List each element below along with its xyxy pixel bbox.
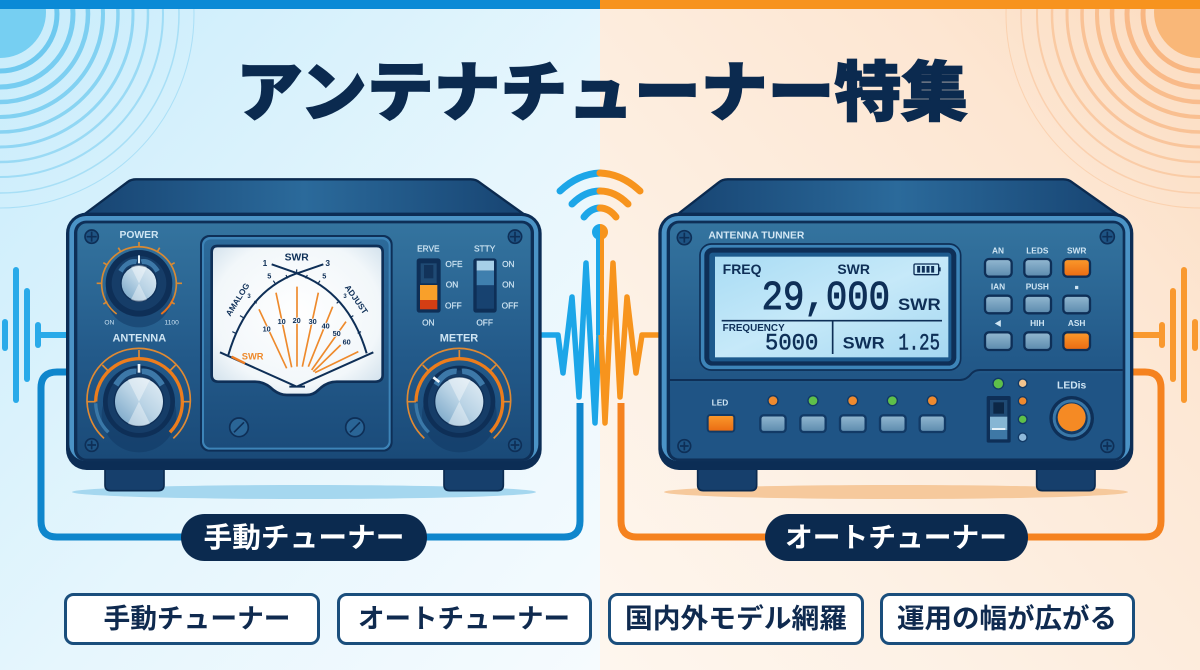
left toggle switch: OFE <box>445 259 463 269</box>
keypad labels <box>991 245 1086 328</box>
cabinet body <box>66 213 542 470</box>
meter knob: METER <box>440 332 478 344</box>
radio rings: top left corner <box>0 0 194 208</box>
meter scale labels: SWR <box>242 352 264 362</box>
indicator lamps <box>768 396 937 406</box>
right toggle switch: ON <box>502 259 515 269</box>
keypad labels: SWR <box>1067 245 1086 255</box>
brand label: ANTENNA TUNNER <box>708 231 805 242</box>
meter needles fan <box>259 287 358 373</box>
meter scale labels: 20 <box>293 316 301 325</box>
waveform: blue <box>541 263 599 423</box>
feet <box>698 468 1095 491</box>
panel: manual tuner device <box>66 179 542 491</box>
meter scale labels: 60 <box>343 338 351 347</box>
LCD display: FREQ <box>723 261 762 277</box>
meter scale labels: 10 <box>278 317 286 326</box>
panel: auto tuner device <box>658 179 1133 491</box>
keypad labels: ASH <box>1068 318 1085 328</box>
LCD display <box>700 244 961 370</box>
cabinet lid <box>83 179 525 215</box>
meter scale labels: 1 <box>263 258 268 268</box>
keypad labels: IAN <box>991 282 1005 292</box>
power knob <box>97 230 182 327</box>
feature box: manual tuner <box>66 594 318 644</box>
meter scale labels: AMALOG <box>223 281 252 318</box>
right toggle switch: STTY <box>474 244 496 254</box>
feature box: auto tuner <box>338 594 590 644</box>
left toggle switch: ON <box>446 279 458 289</box>
meter scale labels: SWR <box>285 253 309 264</box>
LCD display: SWR <box>898 295 941 314</box>
right toggle switch: ON <box>502 279 515 289</box>
pill label: auto tuner: オートチューナー <box>785 516 1007 556</box>
LCD display: 5000 <box>765 330 818 356</box>
feature box: domestic and overseas models: 国内外モデル網羅 <box>625 597 847 636</box>
shadow under manual tuner <box>72 485 536 499</box>
lower LED button <box>708 397 734 432</box>
feature box: manual tuner: 手動チューナー <box>104 597 290 636</box>
left toggle switch: OFF <box>445 300 462 310</box>
LCD display: FREQUENCY <box>723 323 785 334</box>
lower LED button: LED <box>712 397 728 407</box>
wifi antenna icon <box>560 173 640 335</box>
LED round button: LEDis <box>1057 380 1087 391</box>
shadow under auto tuner <box>664 485 1128 499</box>
cabinet lid <box>677 179 1118 215</box>
screws <box>677 230 1114 452</box>
keypad labels: HIH <box>1030 318 1045 328</box>
status lamps <box>993 378 1027 442</box>
meter scale labels: 3 <box>247 294 251 300</box>
background: orange right half <box>600 0 1200 670</box>
keypad labels: LEDS <box>1026 245 1049 255</box>
keypad <box>985 259 1090 350</box>
antenna knob <box>87 332 191 452</box>
meter scale labels: 50 <box>333 329 341 338</box>
radio rings: top right corner <box>1006 0 1200 208</box>
orange cable loop <box>621 372 1161 537</box>
pill label: manual tuner: 手動チューナー <box>204 516 404 556</box>
left toggle switch: ON <box>422 317 435 327</box>
meter scale labels: 10 <box>263 324 271 333</box>
power knob: ON <box>104 320 115 327</box>
meter scale labels: ADJUST <box>343 283 370 316</box>
battery icon <box>914 264 941 275</box>
left toggle switch: ERVE <box>417 244 440 254</box>
LCD display: 1.25 <box>898 330 940 356</box>
analog SWR meter <box>200 235 393 452</box>
right toggle switch: OFF <box>476 317 493 327</box>
feature box: wider operation <box>882 594 1134 644</box>
antenna knob: ANTENNA <box>112 332 166 344</box>
background: blue left half <box>0 0 600 670</box>
meter scale labels: 30 <box>309 317 317 326</box>
LCD display: SWR <box>843 333 885 352</box>
LED round button <box>1049 380 1094 441</box>
meter scale labels <box>223 253 370 362</box>
meter scale labels: 3 <box>343 294 347 300</box>
power knob: POWER <box>119 230 159 241</box>
left toggle switch <box>417 244 463 327</box>
right toggle switch <box>473 244 518 327</box>
feature box: auto tuner: オートチューナー <box>358 597 570 636</box>
right toggle switch: OFF <box>502 300 518 310</box>
keypad labels: ◀ <box>994 319 1002 328</box>
slide switch <box>987 396 1011 443</box>
meter knob <box>407 332 511 452</box>
waveform: orange <box>601 263 659 423</box>
meter scale labels: 40 <box>322 322 330 331</box>
keypad labels: AN <box>992 245 1004 255</box>
meter scale labels: 5 <box>322 272 326 281</box>
title: アンテナチューナー特集 <box>236 40 968 134</box>
keypad labels: PUSH <box>1026 282 1049 292</box>
feature box: domestic and overseas models <box>610 594 862 644</box>
meter scale labels: 3 <box>325 258 330 268</box>
feature box: wider operation: 運用の幅が広がる <box>897 597 1117 636</box>
keypad labels: ■ <box>1075 284 1079 291</box>
cabinet body <box>658 213 1133 470</box>
power knob: 1100 <box>165 320 179 327</box>
screws <box>85 230 522 451</box>
meter scale arc <box>220 264 373 387</box>
meter scale labels: 5 <box>267 272 271 281</box>
panel screws <box>230 418 364 437</box>
feet <box>105 468 503 491</box>
LCD display: SWR <box>837 261 870 277</box>
lower button row <box>760 415 945 432</box>
signal bars: right <box>1132 270 1195 400</box>
pill label: manual tuner <box>181 514 427 561</box>
LCD display: 29,000 <box>762 276 890 322</box>
top bar <box>0 0 1200 9</box>
blue cable loop <box>41 372 580 537</box>
signal bars: left <box>5 270 68 400</box>
